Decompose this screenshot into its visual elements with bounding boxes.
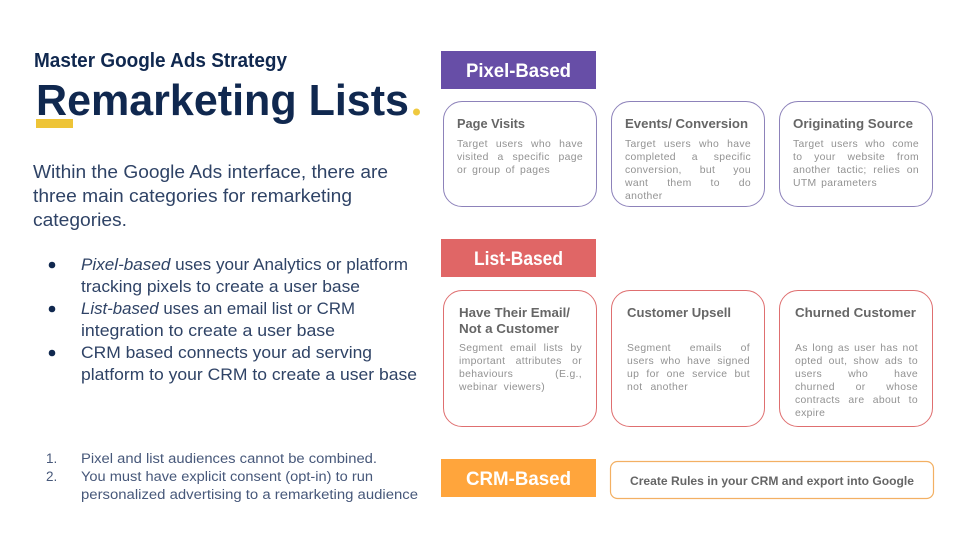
header: Pixel-Based bbox=[441, 51, 596, 89]
intro paragraph: three main categories for remarketing bbox=[33, 186, 352, 206]
header: CRM-Based: CRM-Based bbox=[466, 469, 571, 490]
card description: Segment emails of bbox=[627, 343, 750, 354]
card description: webinar viewers) bbox=[459, 382, 545, 393]
card description: another bbox=[625, 191, 663, 202]
card description: contracts are about to bbox=[795, 395, 918, 406]
card description: users who have bbox=[795, 369, 918, 380]
card description: completed a specific bbox=[625, 152, 751, 163]
card description: Target users who come bbox=[793, 139, 919, 150]
CRM rule box: Create Rules in your CRM and export into Google bbox=[630, 474, 914, 488]
bullet list of categories bbox=[49, 256, 417, 384]
card description: visited a specific page bbox=[457, 152, 583, 163]
eyebrow heading: Master Google Ads Strategy bbox=[34, 50, 288, 72]
card title: Originating Source bbox=[793, 116, 913, 131]
card description: As long as user has not bbox=[795, 343, 918, 354]
numbered notes bbox=[46, 451, 418, 502]
card description: Target users who have bbox=[457, 139, 583, 150]
card description bbox=[627, 343, 750, 393]
card title bbox=[459, 305, 570, 336]
card: Have Their Email/ Not a Customer bbox=[442, 290, 597, 427]
title period bbox=[413, 108, 420, 116]
intro paragraph bbox=[33, 162, 388, 230]
card: Customer Upsell bbox=[610, 290, 765, 427]
header: List-Based bbox=[441, 239, 596, 277]
card title: Have Their Email/ bbox=[459, 305, 570, 320]
card description bbox=[795, 343, 918, 419]
title accent bar bbox=[36, 119, 73, 128]
bullet list of categories: platform to your CRM to create a user base bbox=[81, 366, 417, 384]
card description bbox=[793, 139, 919, 189]
numbered notes: personalized advertising to a remarketing audience bbox=[81, 487, 418, 502]
card description: Segment email lists by bbox=[459, 343, 582, 354]
bullet marker bbox=[49, 350, 55, 356]
bullet list of categories: integration to create a user base bbox=[81, 322, 335, 340]
intro paragraph: Within the Google Ads interface, there are bbox=[33, 162, 388, 182]
card: Page Visits bbox=[442, 101, 597, 207]
card title: Events/ Conversion bbox=[625, 116, 748, 131]
card description: want them to do bbox=[625, 178, 751, 189]
card title: Customer Upsell bbox=[627, 305, 731, 320]
bullet list of categories: Pixel-based uses your Analytics or platform bbox=[81, 256, 408, 274]
numbered notes: You must have explicit consent (opt-in) to run bbox=[81, 469, 373, 484]
card description bbox=[625, 139, 751, 202]
card description: another tactic; relies on bbox=[793, 165, 919, 176]
card description: users who have signed bbox=[627, 356, 750, 367]
bullet list of categories: CRM based connects your ad serving bbox=[81, 344, 372, 362]
intro paragraph: categories. bbox=[33, 210, 127, 230]
card description: conversion, but you bbox=[625, 165, 751, 176]
card description: important attributes or bbox=[459, 356, 582, 367]
card title: Page Visits bbox=[457, 116, 525, 131]
card: Churned Customer bbox=[778, 290, 933, 427]
card description: Target users who have bbox=[625, 139, 751, 150]
card description: behaviours (E.g., bbox=[459, 369, 582, 380]
card description bbox=[459, 343, 582, 393]
card description: up for one service but bbox=[627, 369, 750, 380]
card description: expire bbox=[795, 408, 825, 419]
card: Events/ Conversion bbox=[610, 101, 765, 207]
header: List-Based: List-Based bbox=[474, 249, 563, 270]
bullet marker bbox=[49, 306, 55, 312]
numbered notes: 1. bbox=[46, 451, 57, 466]
card description: or group of pages bbox=[457, 165, 550, 176]
title text: Remarketing Lists bbox=[36, 76, 409, 125]
numbered notes: 2. bbox=[46, 469, 57, 484]
card description bbox=[457, 139, 583, 176]
CRM rule box bbox=[610, 462, 934, 498]
header: CRM-Based bbox=[441, 459, 596, 497]
bullet list of categories: tracking pixels to create a user base bbox=[81, 278, 360, 296]
header: Pixel-Based: Pixel-Based bbox=[466, 61, 571, 82]
card description: opted out, show ads to bbox=[795, 356, 918, 367]
card description: to your website from bbox=[793, 152, 919, 163]
card title: Not a Customer bbox=[459, 321, 559, 336]
main title bbox=[36, 76, 420, 128]
card: Originating Source bbox=[778, 101, 933, 207]
bullet marker bbox=[49, 262, 55, 268]
card description: UTM parameters bbox=[793, 178, 877, 189]
card description: churned or whose bbox=[795, 382, 918, 393]
card title: Churned Customer bbox=[795, 305, 916, 320]
bullet list of categories: List-based uses an email list or CRM bbox=[81, 300, 355, 318]
numbered notes: Pixel and list audiences cannot be combined. bbox=[81, 451, 377, 466]
card description: not another bbox=[627, 382, 688, 393]
